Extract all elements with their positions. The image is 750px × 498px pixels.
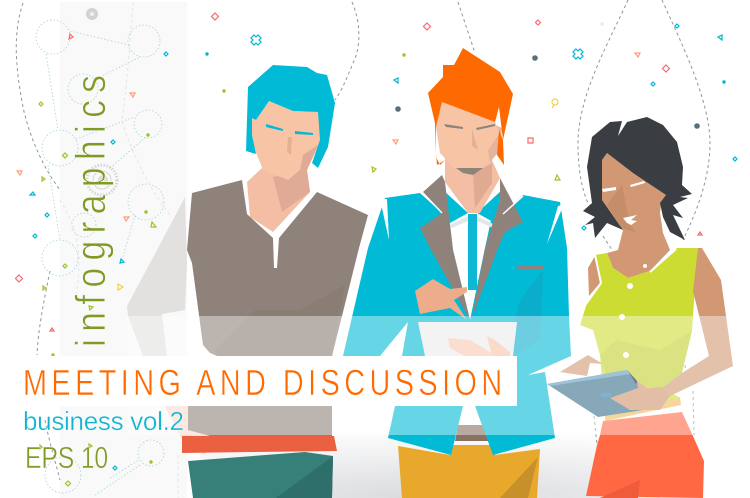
floor shadow <box>200 428 660 498</box>
face <box>602 153 666 233</box>
trouser shade <box>276 456 333 498</box>
eyes <box>266 124 313 135</box>
hair <box>246 65 335 168</box>
left lapel <box>420 175 470 320</box>
bow tie <box>443 190 502 223</box>
white notch <box>380 322 408 356</box>
hair tail <box>497 130 504 165</box>
tablet <box>418 322 517 356</box>
dotted network of circles <box>36 20 164 495</box>
person: man with tablet <box>343 48 571 498</box>
tablet side edge <box>627 370 637 384</box>
ear <box>492 125 502 160</box>
format label: EPS 10 <box>25 440 108 475</box>
vest shade <box>195 285 345 356</box>
top <box>580 248 698 415</box>
subtitle: business vol.2 <box>23 406 184 436</box>
yellow hem <box>605 397 681 421</box>
vest below banner <box>188 406 332 436</box>
left translucent panel <box>60 2 187 498</box>
eyebrows <box>444 124 495 130</box>
skirt shade <box>600 480 640 498</box>
pointing hand <box>415 279 467 320</box>
hand and cuff below banner <box>165 406 210 455</box>
left forearm and hand <box>560 355 603 376</box>
woman's tablet <box>547 370 670 417</box>
face <box>251 101 329 180</box>
confetti dots <box>51 22 726 464</box>
person: woman <box>560 117 733 498</box>
vertical heading: infographics <box>68 75 115 347</box>
goatee <box>456 168 483 175</box>
white strap edge <box>586 249 676 304</box>
icon: gear <box>87 165 117 195</box>
face shade <box>488 133 500 163</box>
icon: grey button <box>86 8 98 20</box>
teal trousers <box>188 452 333 498</box>
face <box>436 102 500 175</box>
shirt <box>445 178 500 320</box>
neck shade <box>473 163 492 208</box>
right hand on tablet <box>487 336 510 356</box>
white sliver on shoulder <box>380 199 389 240</box>
neck and chest <box>607 230 670 278</box>
skirt <box>586 412 704 498</box>
pocket <box>518 266 543 270</box>
neck and chest <box>247 167 310 232</box>
sleeve <box>127 197 187 356</box>
tie strip <box>468 214 477 290</box>
thumb <box>600 392 612 398</box>
white lapel edges <box>423 193 523 214</box>
faint dashed grey lines in panel <box>60 2 178 498</box>
nose <box>287 137 292 155</box>
hand holding tablet <box>610 381 670 410</box>
right lapel <box>472 178 523 318</box>
eyes <box>602 181 645 192</box>
tablet top edge <box>547 370 630 386</box>
white outline of body <box>187 175 372 356</box>
tablet body <box>547 370 663 417</box>
nose <box>472 129 478 150</box>
left upper arm <box>588 256 600 296</box>
hair <box>428 48 513 165</box>
title banner <box>20 356 517 406</box>
yellow trousers <box>398 445 540 498</box>
jacket <box>343 193 571 455</box>
hair <box>583 117 692 240</box>
hand on tablet <box>448 338 495 356</box>
vest <box>187 180 368 356</box>
top fold <box>600 331 692 387</box>
light horizontal band <box>127 316 750 435</box>
trouser shade <box>500 457 538 498</box>
neck shade <box>273 170 310 212</box>
belt <box>455 425 490 441</box>
lips <box>623 215 637 225</box>
buttons <box>619 264 647 358</box>
title: MEETING AND DISCUSSION <box>23 362 502 403</box>
neck <box>445 155 500 213</box>
face shade <box>607 185 637 233</box>
right arm <box>663 248 733 396</box>
belt <box>182 436 337 453</box>
jacket shade <box>505 270 543 360</box>
collar <box>450 216 495 228</box>
face shade <box>288 145 318 180</box>
person: man in grey vest <box>127 65 372 498</box>
